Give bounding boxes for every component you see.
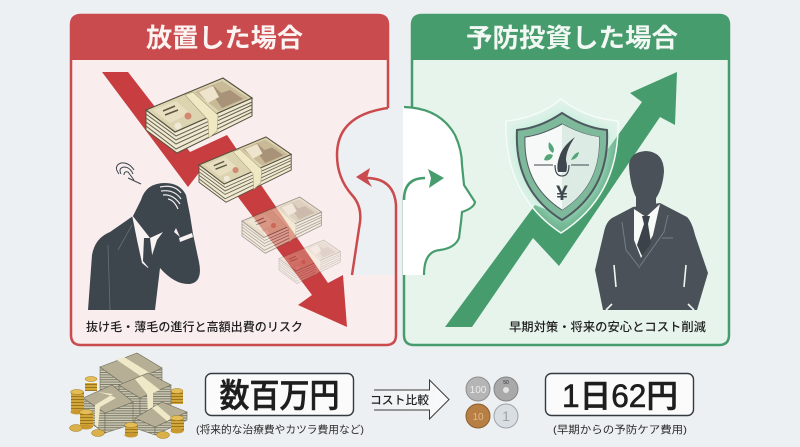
money bundle 3, fading [242,197,322,253]
head profile outline: red [337,108,388,275]
arrow: cost comparison [370,380,449,419]
arrow: into face [404,169,444,200]
caption: left: 抜け毛・薄毛の進行と高額出費のリスク [86,319,303,334]
panel outline: right [404,15,729,345]
caption: early prevention cost: (早期からの予防ケア費用) [553,423,687,436]
cost box: 62 yen per day: 1日62円 [562,378,678,414]
caption: future costs: (将来的な治療費やカツラ費用など) [196,423,364,436]
coin: 50 yen: 50 [503,380,509,386]
money bundle 2 [199,137,291,202]
heading: left: 放置した場合 [146,23,303,53]
face profile [403,107,475,275]
money stack: top [100,353,162,420]
cost box: 62 yen per day [546,374,694,416]
money stack: left [83,385,133,433]
icon: pile of money and coins [70,353,187,438]
coin: 100 yen: 100 [470,385,487,396]
heading bar: left [71,15,388,60]
heading: right: 予防投資した場合 [466,23,678,53]
icon: shield with hair follicle and yen [506,99,618,233]
money bundle 1 [146,78,252,153]
coin stacks behind money [85,376,183,404]
panel outline: left [71,15,396,345]
rising arrow [445,72,677,327]
coin: 1 yen: 1 [502,408,510,424]
icon: confident man [595,151,708,310]
falling arrow [102,72,347,327]
panel: left, neglected case [71,15,396,345]
heading bar: right [412,15,729,60]
face outline: green [404,107,475,275]
coin: 10 yen: 10 [472,412,484,423]
money stack: front right [135,402,187,435]
money stack: middle [119,373,171,425]
panel: right, preventive investment case [403,15,729,345]
icon: shield with hair follicle and yen: ¥ [556,182,568,205]
panel background: right [404,60,729,345]
panel background: left [71,60,396,345]
icon: worried man [88,163,200,310]
caption: right: 早期対策・将来の安心とコスト削減 [509,319,706,334]
arrow head: into head [356,168,372,187]
arrow: cost comparison: コスト比較 [370,393,430,407]
cost box: millions of yen: 数百万円 [220,377,340,414]
icon: four coins [466,377,518,428]
money bundle 4, fading [279,240,340,284]
coin stacks in front [70,390,184,438]
